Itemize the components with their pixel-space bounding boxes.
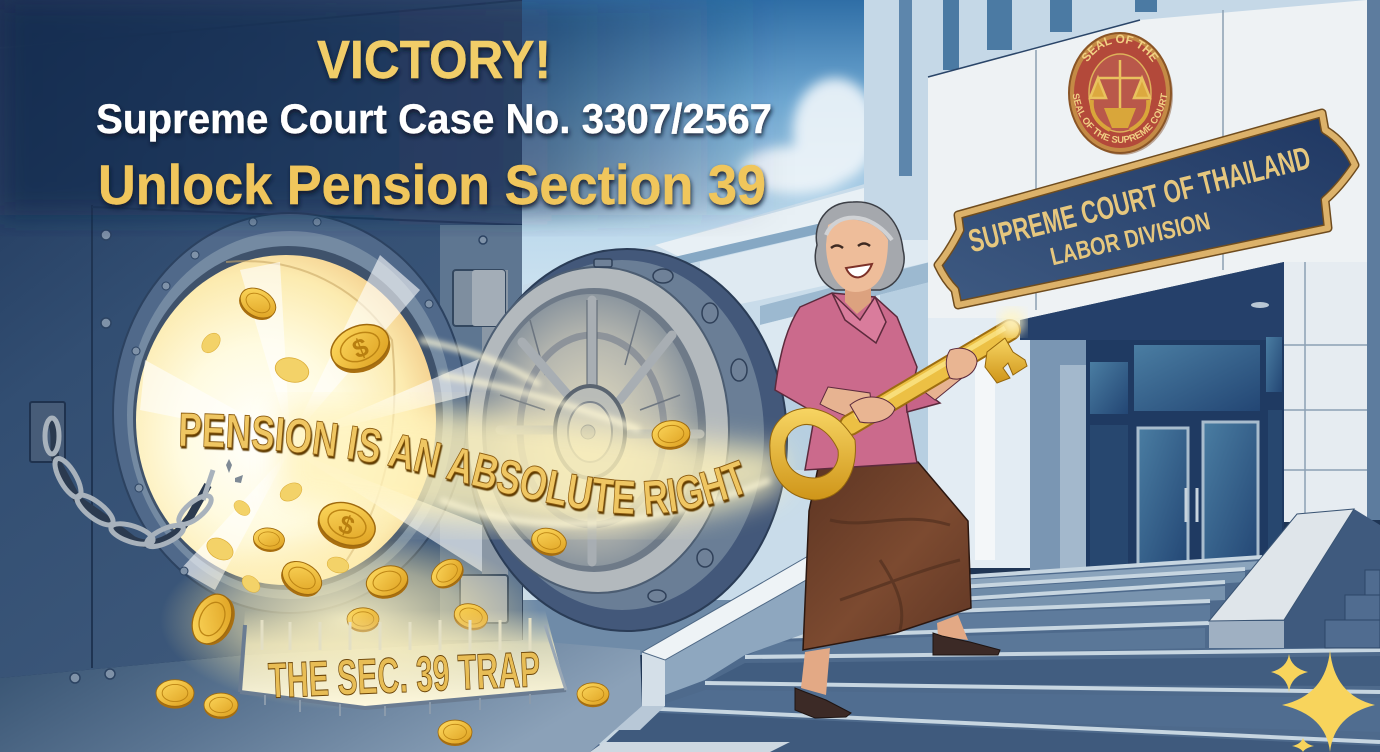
broken chain [30,402,243,551]
vault opening with golden glow [113,213,520,613]
blouse [775,293,917,470]
left wing of court building [523,165,930,655]
right stair ledge [1209,509,1380,648]
right forearm [922,367,962,400]
golden coins [156,282,691,746]
hands [850,348,977,423]
court building upper and facade [864,0,1380,575]
round vault door [467,249,787,631]
spike trap [240,610,566,716]
glowing light stream [160,340,785,710]
golden key [770,328,1027,500]
legs and shoes [795,615,1000,718]
background: vault wall [0,0,522,678]
banner: pension is an absolute right: PENSION IS AN ABSOLUTE RIGHT [180,412,745,518]
golden coins: $ [348,331,373,365]
trap label: THE SEC. 39 TRAP [267,641,541,709]
elderly woman with golden key [770,202,1027,718]
title line: case number: Supreme Court Case No. 3307/2567 [96,95,772,142]
blouse collar [832,293,886,343]
title line: unlock pension: Unlock Pension Section 39 [98,153,766,216]
background: cloud [740,78,877,194]
head and hair [815,202,904,314]
glass entrance doors [1086,337,1284,575]
title line: victory: VICTORY! [317,30,551,90]
seal of the supreme court: SEAL OF THE SUPREME COURT [1072,92,1168,143]
sign: supreme court of thailand labor division [938,113,1355,305]
hinges [453,270,508,623]
background: sky [500,0,920,340]
left forearm [820,387,873,423]
seal of the supreme court [1068,32,1173,155]
left stair ledge [612,555,815,730]
sign: supreme court of thailand labor division: LABOR DIVISION [1048,207,1213,271]
steps [590,556,1380,752]
dark overlay behind title [0,0,780,215]
sparkles [1271,650,1375,752]
title [96,30,772,216]
golden coins: $ [335,508,359,542]
seal of the supreme court: SEAL OF THE [1082,34,1159,62]
wall panel lines and bolts [0,0,522,683]
right sleeve [905,385,940,412]
background: floor [0,640,642,752]
skirt [803,462,971,650]
key sparkle [999,309,1025,335]
